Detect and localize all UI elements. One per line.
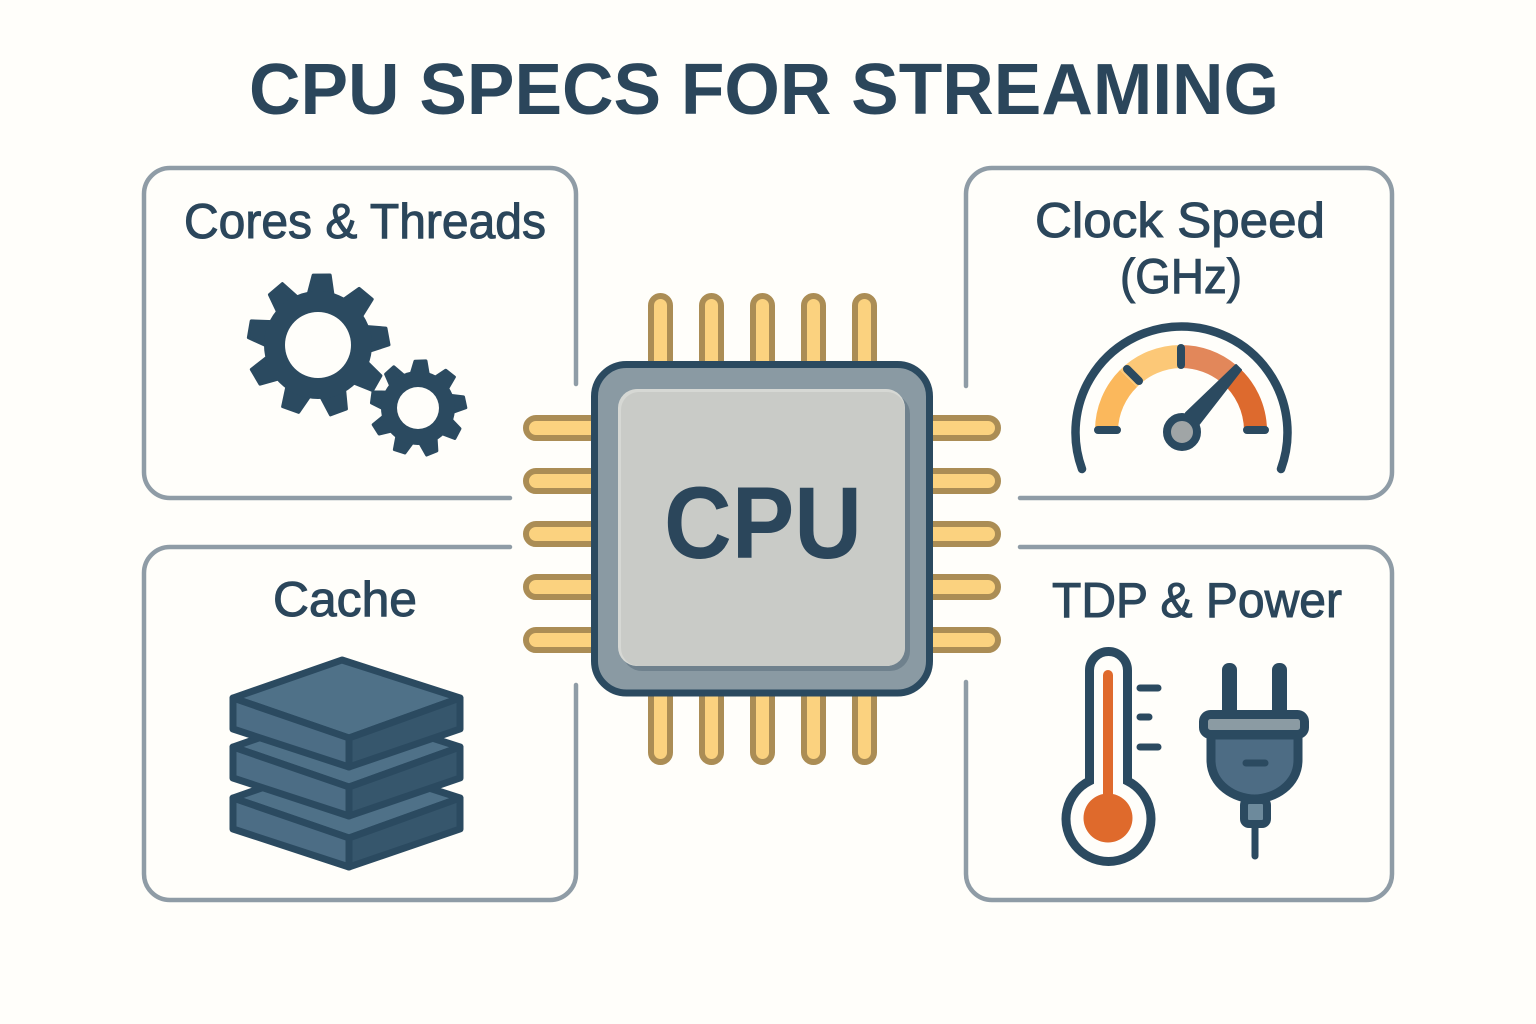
heading: cache: Cache [273, 573, 417, 627]
heading: cores and threads: Cores & Threads [184, 195, 546, 249]
chip pins [526, 296, 998, 762]
icon: speedometer [1076, 326, 1288, 469]
panel: cache [144, 547, 576, 900]
heading: GHz: (GHz) [1120, 250, 1242, 304]
icon: power plug [1204, 663, 1304, 856]
chip label: CPU [664, 466, 862, 580]
panel: cores and threads [144, 168, 576, 498]
chip die highlight [618, 389, 905, 666]
icon: stacked layers [233, 660, 460, 867]
heading: TDP and power: TDP & Power [1052, 574, 1342, 628]
panel: TDP and power [966, 547, 1392, 900]
title: CPU SPECS FOR STREAMING [249, 50, 1279, 130]
heading: clock speed: Clock Speed [1035, 194, 1325, 248]
icon: thermometer [1066, 652, 1158, 862]
chip body [594, 364, 930, 693]
chip die [621, 392, 905, 666]
chip die shadow [622, 394, 910, 671]
panel: clock speed [966, 168, 1392, 498]
CPU chip [526, 296, 998, 762]
icon: gears [246, 274, 466, 456]
